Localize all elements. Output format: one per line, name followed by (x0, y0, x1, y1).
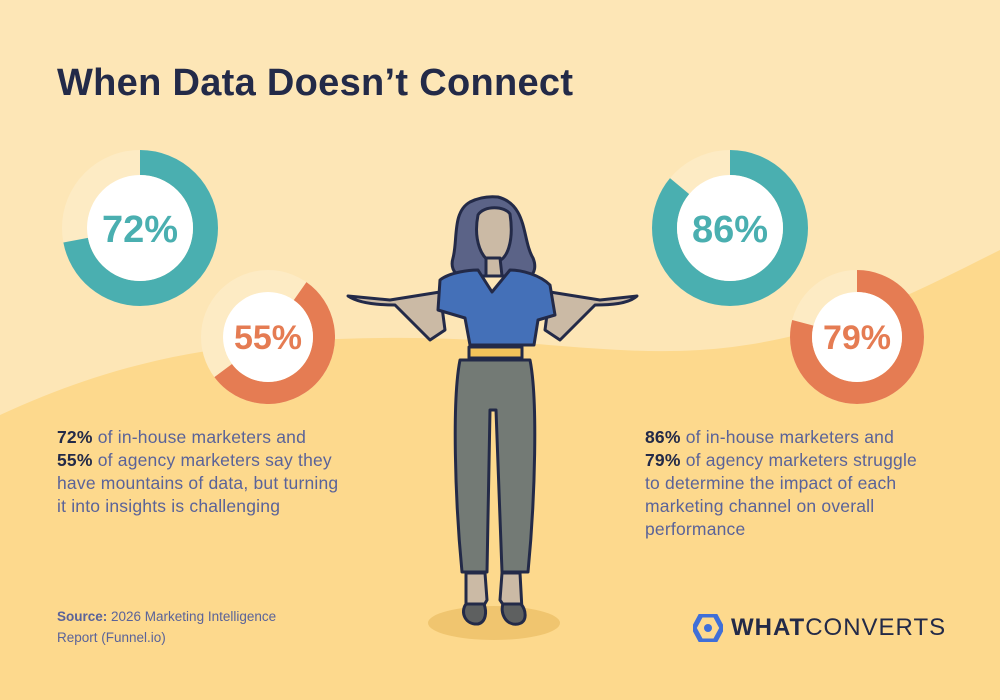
left stat text: it into insights is challenging (57, 496, 280, 516)
illustration: woman shrugging (346, 195, 638, 640)
donut 55% (201, 270, 335, 404)
right stat text: marketing channel on overall (645, 496, 874, 516)
source: Source: 2026 Marketing Intelligence (57, 609, 276, 624)
source (57, 609, 276, 645)
source: Report (Funnel.io) (57, 630, 166, 645)
logo: WhatConverts: WHATCONVERTS (731, 614, 946, 641)
donut 79% (790, 270, 924, 404)
right stat text: 86% of in-house marketers and (645, 427, 894, 447)
left stat text: 55% of agency marketers say they (57, 450, 332, 470)
right stat text: performance (645, 519, 745, 539)
left stat text: 72% of in-house marketers and (57, 427, 306, 447)
donut 72%: 72% (102, 209, 178, 251)
donut 72% (62, 150, 218, 306)
donut 86% (652, 150, 808, 306)
right stat text: to determine the impact of each (645, 473, 896, 493)
donut 86%: 86% (692, 209, 768, 251)
right stat text: 79% of agency marketers struggle (645, 450, 917, 470)
left stat text (57, 427, 338, 516)
right stat text (645, 427, 917, 539)
title: When Data Doesn’t Connect (57, 62, 573, 104)
donut 55%: 55% (234, 319, 302, 357)
left stat text: have mountains of data, but turning (57, 473, 338, 493)
donut 79%: 79% (823, 319, 891, 357)
